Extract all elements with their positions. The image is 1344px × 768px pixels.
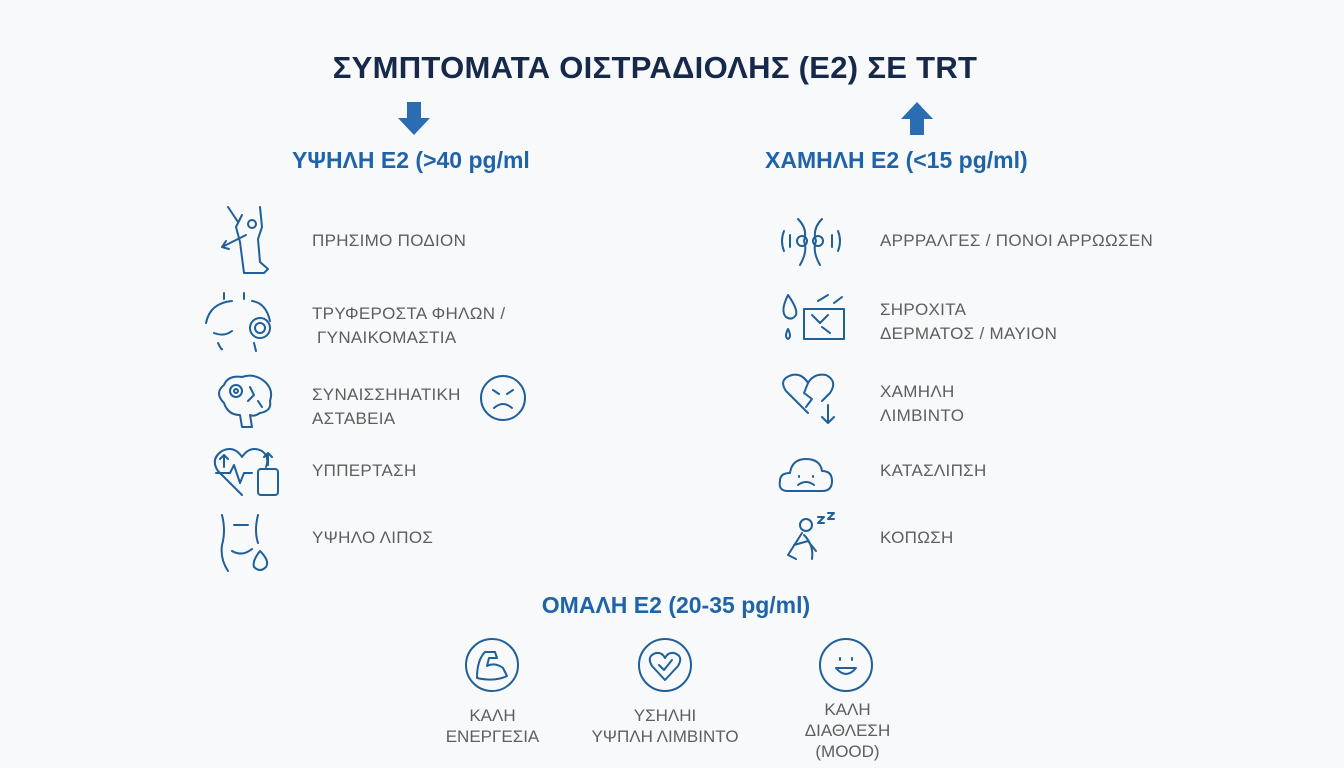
icon: muscle bbox=[465, 638, 519, 692]
icon: happy face bbox=[819, 638, 873, 692]
icon: broken heart bbox=[782, 374, 835, 424]
panel: high E2 symptoms bbox=[205, 206, 526, 572]
text: libido bbox=[591, 706, 739, 746]
text: libido: ΥΣΗΛΗΙ bbox=[634, 706, 696, 725]
text: mood bbox=[805, 700, 890, 761]
text: dry skin bbox=[880, 300, 1057, 343]
icon: angry face bbox=[480, 375, 526, 421]
text: energy: ΕΝΕΡΓΕΣΙΑ bbox=[446, 727, 539, 746]
text: energy bbox=[446, 706, 540, 746]
text: gynecomastia: ΓΥΝΑΙΚΟΜΑΣΤΙΑ bbox=[317, 328, 456, 347]
icon: dry skin bbox=[782, 294, 845, 340]
icon: brain bbox=[218, 374, 272, 428]
panel: low E2 symptoms bbox=[778, 218, 1153, 560]
text: swelling: ΠΡΗΣΙΜΟ ΠΟΔΙΟΝ bbox=[312, 231, 466, 250]
text: libido: ΥΨΠΛΗ ΛΙΜΒΙΝΤΟ bbox=[591, 727, 739, 746]
text: high fat: ΥΨΗΛΟ ΛΙΠΟΣ bbox=[312, 528, 433, 547]
text: mood: ΚΑΛΗ bbox=[824, 700, 871, 719]
icon: up arrow bbox=[901, 102, 933, 135]
panel: normal benefits bbox=[446, 638, 890, 761]
icon: tired person bbox=[787, 512, 835, 560]
title: ΣΥΜΠΤΟΜΑΤΑ ΟΙΣΤΡΑΔΙΟΛΗΣ (E2) ΣΕ TRT bbox=[333, 50, 977, 85]
text: emotional instability bbox=[312, 385, 461, 428]
text: energy: ΚΑΛΗ bbox=[469, 706, 516, 725]
text: fatigue: ΚΟΠΩΣΗ bbox=[880, 528, 954, 547]
text: emotional instability: ΣΥΝΑΙΣΣΗΗΑΤΙΚΗ bbox=[312, 385, 461, 404]
text: low libido: ΧΑΜΗΛΗ bbox=[880, 382, 955, 401]
heading: normal E2: ΟΜΑΛΗ Ε2 (20-35 pg/ml) bbox=[542, 592, 810, 618]
text: joint pain: ΑΡΡΡΑΛΓΕΣ / ΠΟΝΟΙ ΑΡΡΩΩΣΕΝ bbox=[880, 231, 1153, 250]
icon: heart pressure bbox=[214, 448, 279, 496]
text: dry skin: ΣΗΡΟΧΙΤΑ bbox=[880, 300, 966, 319]
icon: heart check bbox=[638, 638, 692, 692]
icon: down arrow bbox=[398, 102, 430, 135]
heading: low E2: ΧΑΜΗΛΗ Ε2 (<15 pg/ml) bbox=[765, 147, 1028, 173]
icon: leg bbox=[221, 206, 269, 274]
text: emotional instability: ΑΣΤΑΒΕΙΑ bbox=[312, 409, 395, 428]
heading: high E2: ΥΨΗΛΗ Ε2 (>40 pg/ml bbox=[292, 147, 530, 173]
text: mood: (MOOD) bbox=[815, 742, 880, 761]
icon: sad cloud bbox=[778, 458, 833, 492]
icon: belly fat bbox=[220, 514, 268, 572]
text: low libido: ΛΙΜΒΙΝΤΟ bbox=[880, 406, 964, 425]
text: gynecomastia bbox=[312, 304, 506, 347]
text: dry skin: ΔΕΡΜΑΤΟΣ / ΜΑΥΙΟΝ bbox=[880, 324, 1057, 343]
text: gynecomastia: ΤΡΥΦΕΡΟΣΤΑ ΦΗΛΩΝ / bbox=[312, 304, 505, 323]
text: hypertension: ΥΠΠΕΡΤΑΣΗ bbox=[312, 461, 417, 480]
text: low libido bbox=[880, 382, 964, 425]
icon: chest bbox=[205, 292, 271, 352]
text: depression: ΚΑΤΑΣΛΙΠΣΗ bbox=[880, 461, 987, 480]
icon: joints bbox=[781, 218, 841, 266]
text: mood: ΔΙΑΘΛΕΣΗ bbox=[805, 721, 890, 740]
